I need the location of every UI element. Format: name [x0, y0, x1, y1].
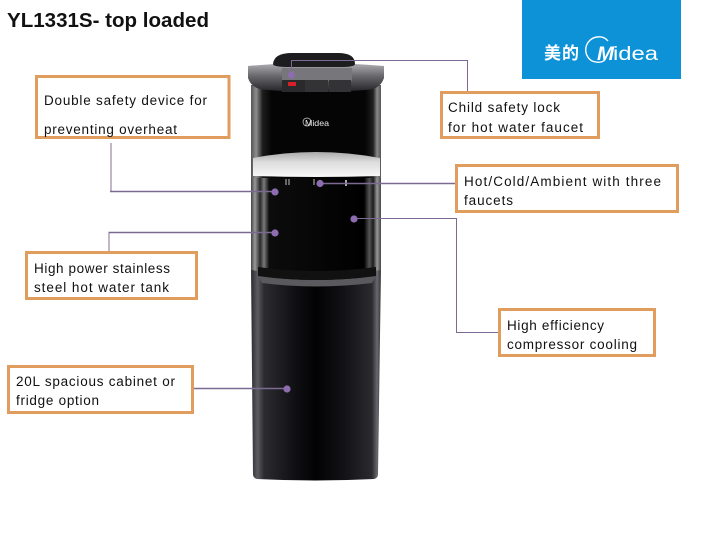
faucet buttons [282, 80, 351, 92]
callout: compressor cooling: compressor cooling [507, 337, 637, 352]
callout: cabinet: fridge option [16, 393, 99, 408]
callout: child safety lock: Child safety lock [448, 100, 560, 115]
title: YL1331S- top loaded [7, 10, 209, 32]
lower cabinet [251, 268, 381, 480]
connector: stainless steel tank [108, 229, 279, 251]
water bottle cap [273, 53, 355, 67]
callout: child safety lock [442, 92, 598, 138]
callout: compressor cooling: High efficiency [507, 318, 604, 333]
faucets [285, 179, 347, 186]
brand logo: 美的 [544, 39, 579, 64]
callout: stainless steel tank: High power stainless [34, 261, 170, 276]
callout: child safety lock: for hot water faucet [448, 120, 583, 135]
connector: child safety lock [288, 60, 468, 91]
dispensing recess [251, 176, 381, 275]
connector: double safety device [110, 143, 279, 196]
upper body [251, 85, 381, 178]
callout: hot cold ambient: Hot/Cold/Ambient with three [464, 174, 661, 189]
connector: faucets [316, 180, 455, 187]
callout: compressor cooling [500, 310, 654, 356]
brand logo: idea [613, 44, 659, 65]
callout: stainless steel tank: steel hot water tank [34, 280, 169, 295]
callout: stainless steel tank [26, 252, 196, 298]
connector: compressor cooling [350, 215, 498, 332]
control panel [282, 68, 352, 81]
callout: cabinet [8, 366, 192, 412]
connector: cabinet [194, 385, 291, 393]
top panel [248, 63, 384, 92]
callout: double safety device [36, 76, 229, 138]
cabinet top ledge [258, 276, 376, 286]
callout: hot cold ambient: faucets [464, 193, 513, 208]
silver band [253, 152, 380, 177]
brand logo: M [597, 44, 615, 65]
callout: hot cold ambient [456, 166, 678, 212]
brand logo [522, 0, 681, 79]
body logo: Midea [305, 118, 329, 128]
callout: double safety device: preventing overheat [44, 122, 177, 137]
callout: double safety device: Double safety device for [44, 93, 208, 108]
callout: cabinet: 20L spacious cabinet or [16, 374, 176, 389]
water dispenser [248, 53, 384, 480]
drip tray [258, 267, 376, 280]
